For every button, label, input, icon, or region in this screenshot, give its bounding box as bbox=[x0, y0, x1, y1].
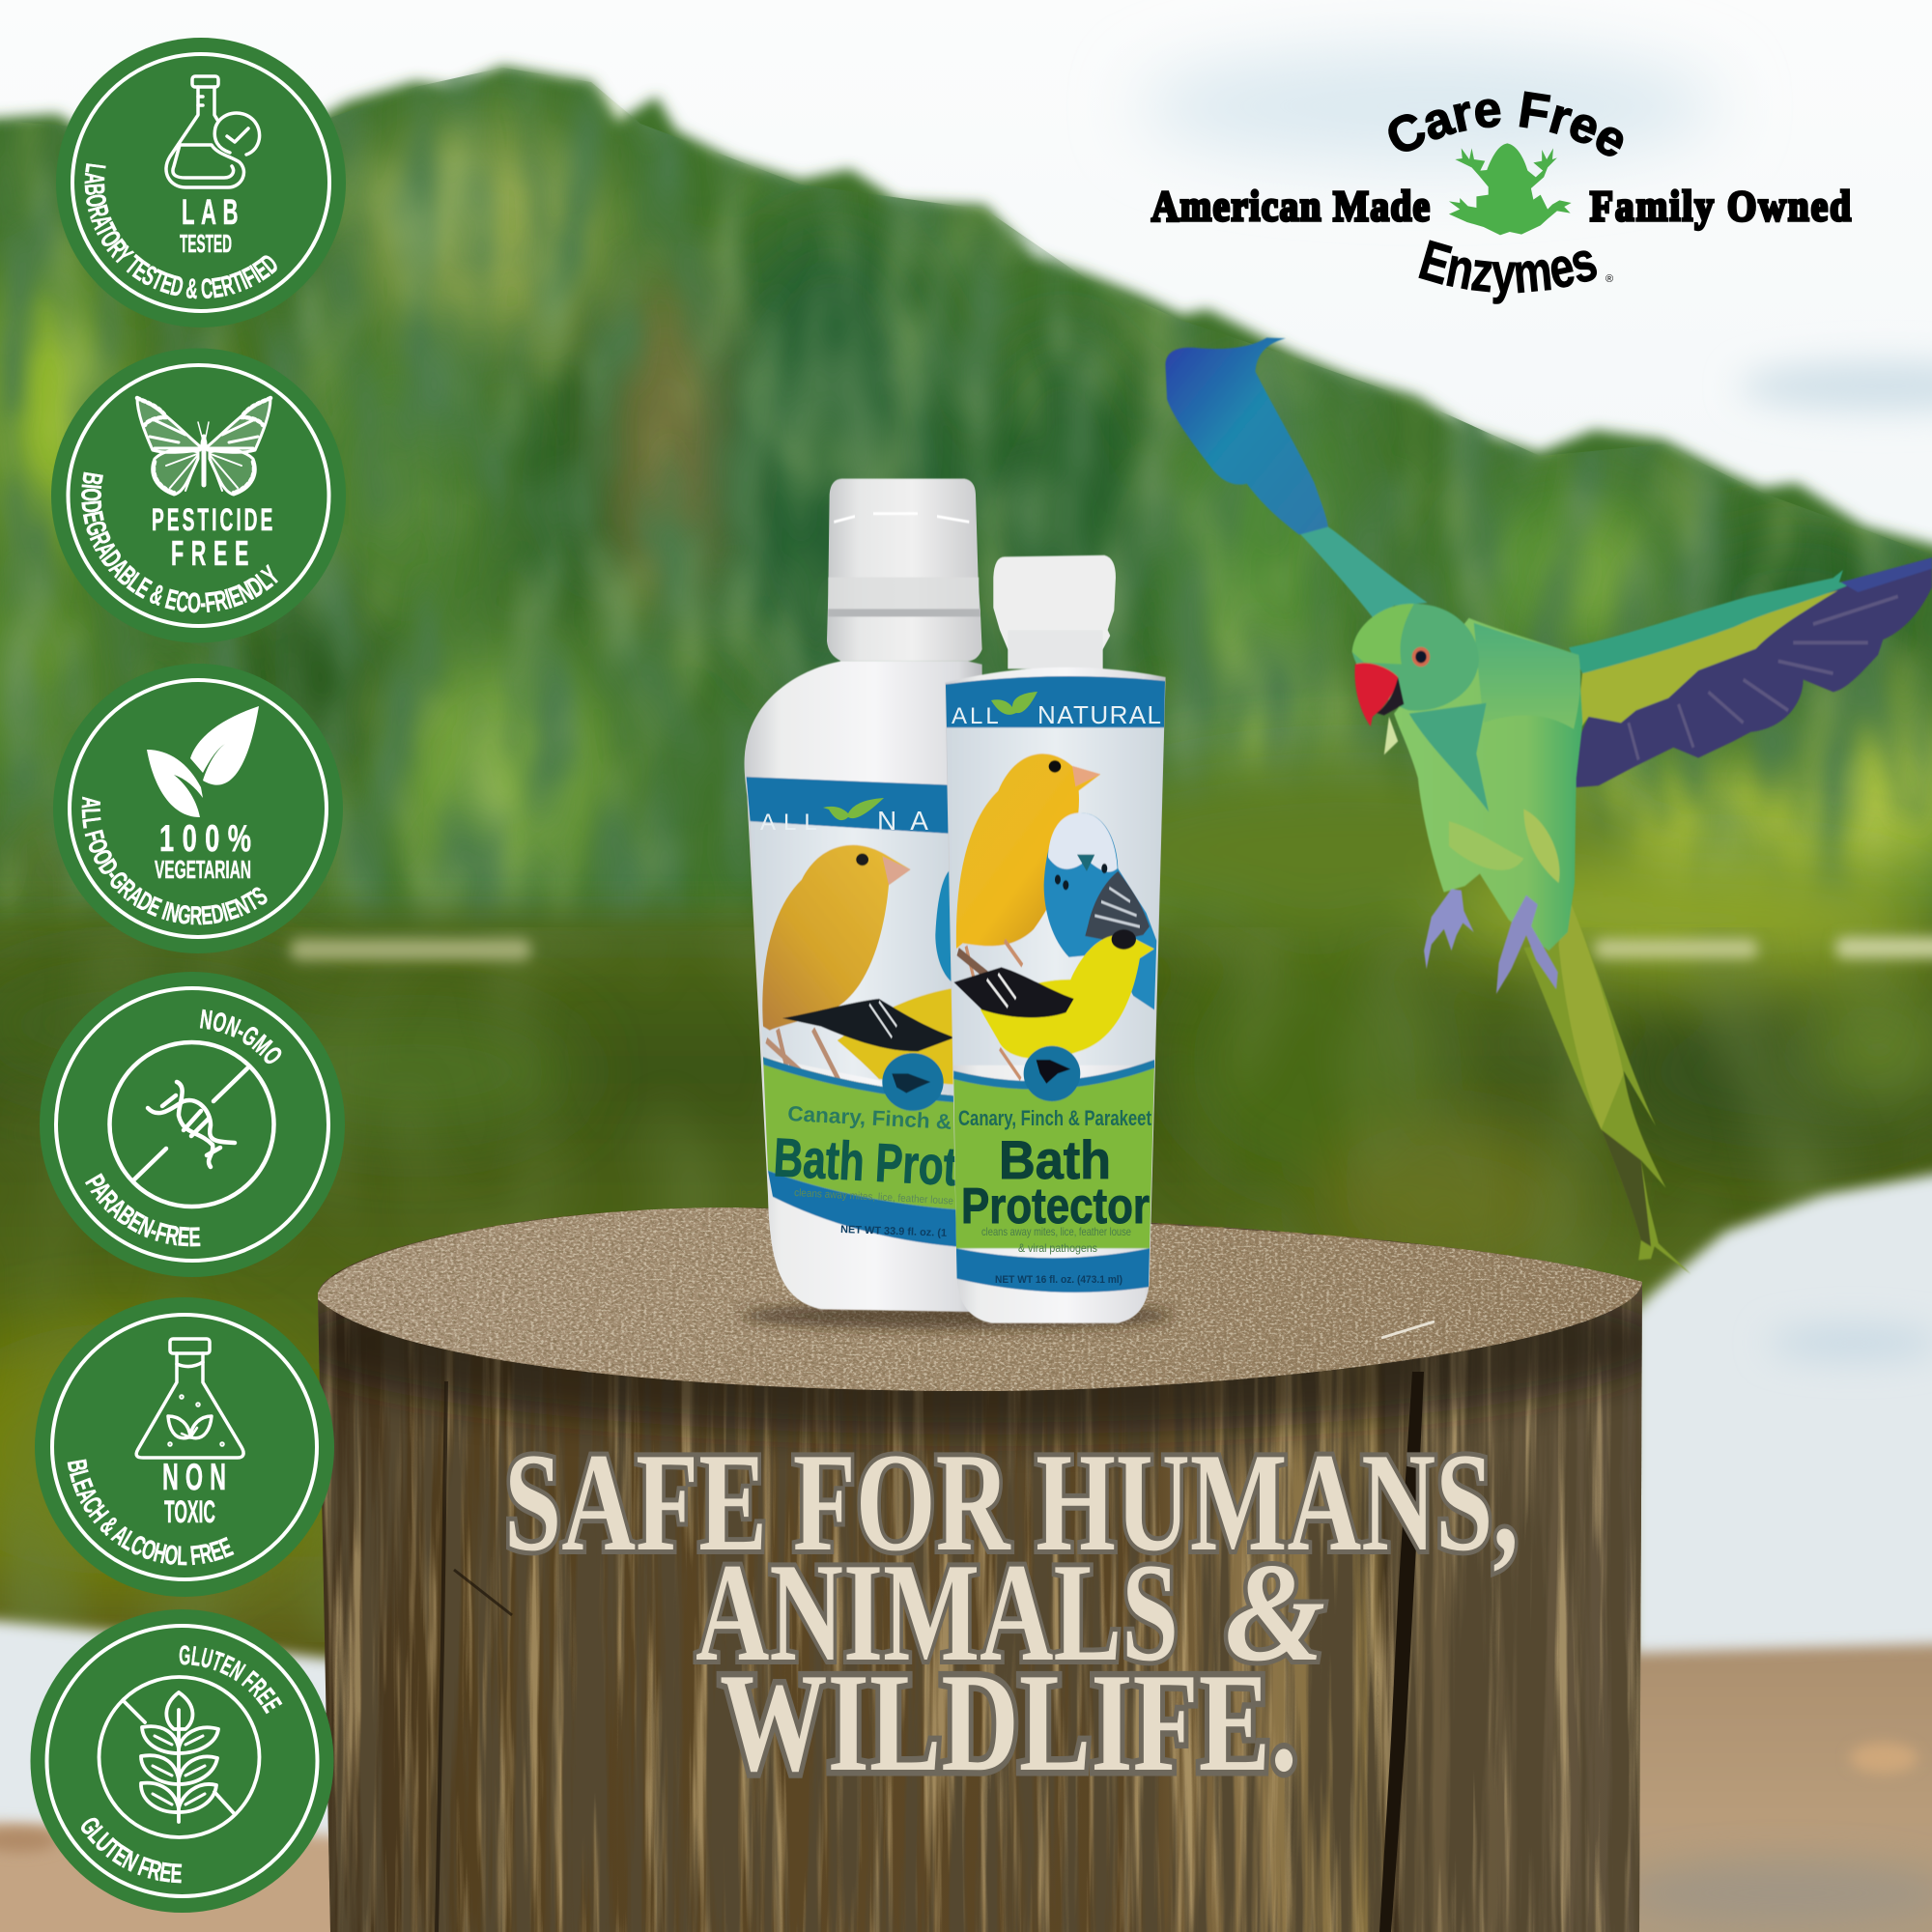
parrot in flight bbox=[1165, 338, 1932, 1274]
label band top bbox=[747, 777, 956, 834]
emblem bbox=[1024, 1046, 1080, 1101]
small bottle label top: ALL bbox=[952, 703, 1002, 729]
icon: wheat in crossed circle bbox=[99, 1677, 259, 1837]
badge: lab tested bbox=[56, 38, 346, 327]
blue lower label bbox=[768, 1171, 956, 1246]
sky reflection right bbox=[1633, 1164, 1932, 1671]
cap bbox=[993, 555, 1116, 649]
small bottle product text: Canary, Finch & Parakeet bbox=[958, 1106, 1152, 1130]
label: FREE: FREE bbox=[171, 534, 256, 573]
registered mark: ® bbox=[1605, 273, 1613, 285]
large bottle label text bbox=[760, 798, 942, 836]
label: TOXIC: TOXIC bbox=[164, 1494, 215, 1529]
green label bbox=[953, 1065, 1154, 1248]
icon: butterfly bbox=[137, 398, 270, 495]
small bottle product text: Protector bbox=[961, 1179, 1150, 1235]
stump top surface bbox=[318, 1208, 1642, 1391]
left wing feathers bbox=[1165, 338, 1328, 535]
goldfinch bbox=[838, 987, 956, 1085]
label: VEGETARIAN: VEGETARIAN bbox=[155, 855, 251, 884]
small bottle product text: Bath bbox=[999, 1129, 1111, 1190]
curved label: LABORATORY TESTED & CERTIFIED bbox=[85, 163, 277, 299]
curved label: PARABEN-FREE: PARABEN-FREE bbox=[85, 1173, 201, 1246]
left foot bbox=[1424, 889, 1474, 969]
tail feathers bbox=[1523, 895, 1690, 1274]
large bottle product text: Bath Prot bbox=[772, 1126, 958, 1197]
curved label: ALL FOOD-GRADE INGREDIENTS bbox=[81, 796, 268, 925]
small bottle product text: & viral pathogens bbox=[1018, 1241, 1097, 1255]
bottle shadow on stump bbox=[739, 1302, 1174, 1329]
tagline right: Family Owned bbox=[1590, 184, 1851, 231]
sand foreground bbox=[1594, 1642, 1932, 1932]
logo arc text: Enzymes: Enzymes bbox=[1418, 240, 1598, 304]
curved label: bottom: GLUTEN FREE bbox=[81, 1818, 182, 1884]
lake water bbox=[0, 913, 1932, 1686]
curved label: BLEACH & ALCOHOL FREE bbox=[68, 1459, 234, 1565]
eye bbox=[1412, 647, 1430, 667]
forest hillside bbox=[0, 66, 1932, 976]
icon: flask with check bbox=[166, 76, 260, 187]
lower label bbox=[956, 1248, 1150, 1293]
badge: non-GMO bbox=[40, 972, 345, 1277]
badge: gluten free bbox=[31, 1609, 334, 1913]
wooden stump bbox=[284, 1198, 1675, 1932]
budgie bbox=[1044, 813, 1156, 1009]
large bottle product text bbox=[772, 1101, 958, 1239]
top band bbox=[946, 676, 1165, 727]
tagline left: American Made bbox=[1151, 184, 1430, 231]
sky reflection left bbox=[0, 1615, 348, 1835]
label: NON: NON bbox=[162, 1456, 233, 1497]
curved label: top: GLUTEN FREE bbox=[180, 1645, 282, 1714]
curved label: NON-GMO: NON-GMO bbox=[200, 1009, 282, 1065]
large bottle label text: ALL bbox=[760, 810, 825, 836]
headline line 2: ANIMALS bbox=[696, 1534, 1179, 1690]
left wing arm bbox=[1299, 526, 1428, 618]
small bottle label top bbox=[952, 692, 1161, 729]
beak bbox=[1354, 663, 1398, 726]
headline bbox=[504, 1424, 1519, 1801]
icon: flask with leaf bbox=[136, 1339, 243, 1458]
right wing teal leading edge bbox=[1569, 570, 1861, 673]
logo arc text: Care Free: Care Free bbox=[1388, 91, 1623, 156]
green label bbox=[763, 1057, 956, 1209]
right wing yellow coverts bbox=[1577, 590, 1838, 735]
label photo bbox=[751, 821, 956, 1095]
badge: pesticide free bbox=[51, 348, 346, 643]
badge: non toxic bbox=[35, 1297, 334, 1597]
canary bbox=[956, 753, 1100, 949]
body bbox=[945, 668, 1166, 1323]
headline line 1: SAFE FOR HUMANS, bbox=[504, 1424, 1519, 1580]
small product bottle bbox=[945, 555, 1166, 1323]
label: TESTED: TESTED bbox=[180, 229, 232, 258]
curved label: BIODEGRADABLE & ECO-FRIENDLY bbox=[81, 471, 278, 612]
cap bbox=[827, 478, 982, 661]
headline line 3: WILDLIFE. bbox=[720, 1644, 1297, 1801]
right wing feathers bbox=[1575, 557, 1932, 787]
head bbox=[1352, 604, 1479, 711]
badge: vegetarian bbox=[53, 664, 343, 953]
label: 100%: 100% bbox=[159, 818, 259, 860]
large bottle product text: cleans away mites, lice, feather louse bbox=[794, 1187, 953, 1208]
throat tuft bbox=[1384, 717, 1398, 754]
canary bbox=[762, 845, 911, 1031]
small bottle product text bbox=[958, 1106, 1152, 1286]
large bottle product text: NET WT 33.9 fl. oz. (1 bbox=[840, 1224, 947, 1239]
photo bbox=[947, 727, 1164, 1065]
goldfinch bbox=[980, 935, 1154, 1059]
headline line 2: & bbox=[1225, 1534, 1325, 1690]
small bottle label top: NATURAL bbox=[1037, 700, 1161, 729]
frog icon bbox=[1449, 143, 1572, 235]
body bbox=[1394, 618, 1582, 951]
breast patch bbox=[1409, 703, 1489, 812]
label: PESTICIDE: PESTICIDE bbox=[152, 502, 275, 537]
emblem bbox=[882, 1053, 944, 1111]
large bottle product text: Canary, Finch & bbox=[787, 1101, 952, 1134]
body bbox=[745, 661, 982, 1312]
label: LAB: LAB bbox=[182, 192, 244, 232]
large product bottle bbox=[745, 478, 982, 1312]
right foot bbox=[1496, 895, 1557, 994]
icon: DNA in crossed circle bbox=[110, 1042, 274, 1207]
icon: leaves bbox=[147, 706, 259, 817]
small bottle product text: cleans away mites, lice, feather louse bbox=[981, 1225, 1131, 1238]
small bottle product text: NET WT 16 fl. oz. (473.1 ml) bbox=[995, 1274, 1122, 1286]
budgie sliver bbox=[935, 868, 956, 985]
large bottle label text: NA bbox=[877, 806, 942, 836]
brand logo bbox=[1150, 91, 1852, 304]
